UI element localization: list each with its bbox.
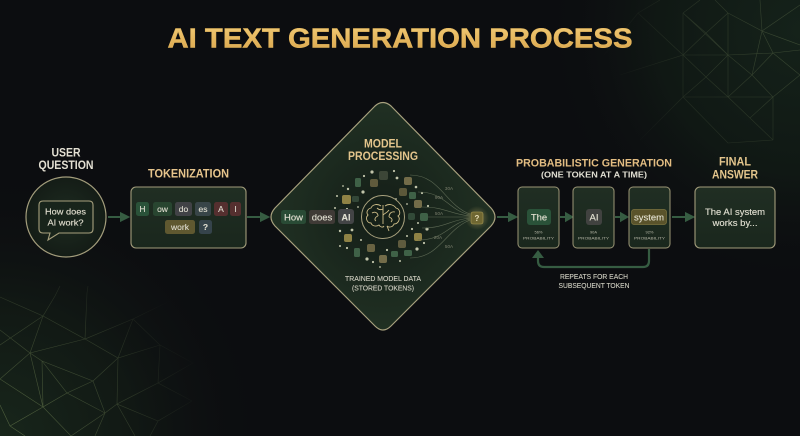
heading: user question: QUESTION	[38, 158, 94, 172]
token chips: work	[170, 222, 190, 232]
input tokens: AI	[342, 212, 350, 222]
heading: final answer: FINAL	[719, 156, 751, 168]
input tokens: does	[312, 212, 333, 224]
step: probabilistic generation	[516, 158, 672, 290]
card: The	[518, 187, 559, 248]
card: The: PROBABILITY	[523, 236, 554, 240]
caption: trained model data: (STORED TOKENS)	[352, 286, 414, 292]
card: The: The	[531, 212, 547, 224]
token chips	[136, 202, 241, 234]
arrow: tokenization to model	[247, 214, 268, 220]
speech bubble: AI work?	[48, 218, 84, 228]
probability curves	[410, 175, 470, 258]
arrow: The to AI	[560, 214, 572, 220]
token chips: es	[199, 204, 207, 214]
probability labels: 20A	[434, 235, 443, 240]
card: system: PROBABILITY	[634, 236, 665, 240]
probability labels: 30A	[445, 186, 454, 191]
input tokens	[281, 209, 354, 224]
token chips: ?	[203, 222, 208, 232]
card: system	[629, 187, 670, 248]
heading: model processing: PROCESSING	[348, 149, 418, 163]
arrow: model to generation	[497, 214, 516, 220]
card: The: 56%	[534, 230, 543, 234]
output token: ?	[475, 214, 480, 223]
brain icon	[362, 196, 404, 238]
token particle ring	[334, 170, 429, 268]
card: system: 92%	[645, 230, 654, 234]
answer text: The AI system	[705, 207, 765, 217]
caption: repeats: REPEATS FOR EACH	[560, 274, 628, 281]
card: AI	[573, 187, 614, 248]
card: system: system	[634, 212, 664, 224]
card: AI: 90A	[590, 230, 597, 234]
caption: repeats: SUBSEQUENT TOKEN	[558, 283, 630, 290]
probability labels	[434, 186, 454, 249]
heading: user question: USER	[52, 146, 81, 160]
answer text	[705, 207, 765, 228]
card: AI: PROBABILITY	[578, 236, 609, 240]
speech bubble	[39, 201, 93, 240]
step: model processing diamond	[271, 102, 495, 330]
step: user question	[26, 146, 106, 257]
token chips: I	[234, 204, 237, 214]
probability labels: 50A	[435, 211, 444, 216]
token chips: do	[179, 204, 188, 214]
step: final answer	[695, 156, 775, 248]
heading: user question	[38, 146, 94, 172]
output token	[465, 206, 489, 230]
input tokens: How	[284, 212, 303, 224]
tokenization panel	[131, 187, 246, 248]
heading: model processing: MODEL	[364, 136, 402, 150]
caption: repeats	[558, 274, 630, 290]
caption: trained model data: TRAINED MODEL DATA	[345, 276, 421, 283]
arrow: generation to answer	[672, 214, 693, 220]
caption: trained model data	[345, 276, 421, 292]
arrow: AI to system	[615, 214, 627, 220]
token chips: H	[139, 204, 146, 214]
diamond panel	[271, 102, 495, 330]
circle panel	[26, 177, 106, 257]
heading: probabilistic generation: (ONE TOKEN AT A TIME)	[541, 170, 647, 180]
heading: probabilistic generation	[516, 158, 672, 180]
heading: model processing	[348, 136, 418, 163]
loop arrow	[532, 249, 649, 267]
arrow: question to tokenization	[108, 214, 128, 220]
answer text: works by...	[711, 218, 758, 228]
heading: tokenization: TOKENIZATION	[148, 168, 229, 180]
step: tokenization	[131, 168, 246, 248]
probability labels: 90A	[435, 195, 444, 200]
heading: final answer	[712, 156, 759, 182]
card: AI: AI	[590, 212, 598, 224]
token chips: ow	[157, 204, 169, 214]
token chips: A	[218, 204, 224, 214]
heading: probabilistic generation: PROBABILISTIC GENERATION	[516, 158, 672, 170]
probability labels: 50A	[445, 244, 454, 249]
title: AI TEXT GENERATION PROCESS	[168, 22, 632, 54]
heading: final answer: ANSWER	[712, 170, 759, 182]
answer panel	[695, 187, 775, 248]
speech bubble: How does	[45, 206, 86, 216]
